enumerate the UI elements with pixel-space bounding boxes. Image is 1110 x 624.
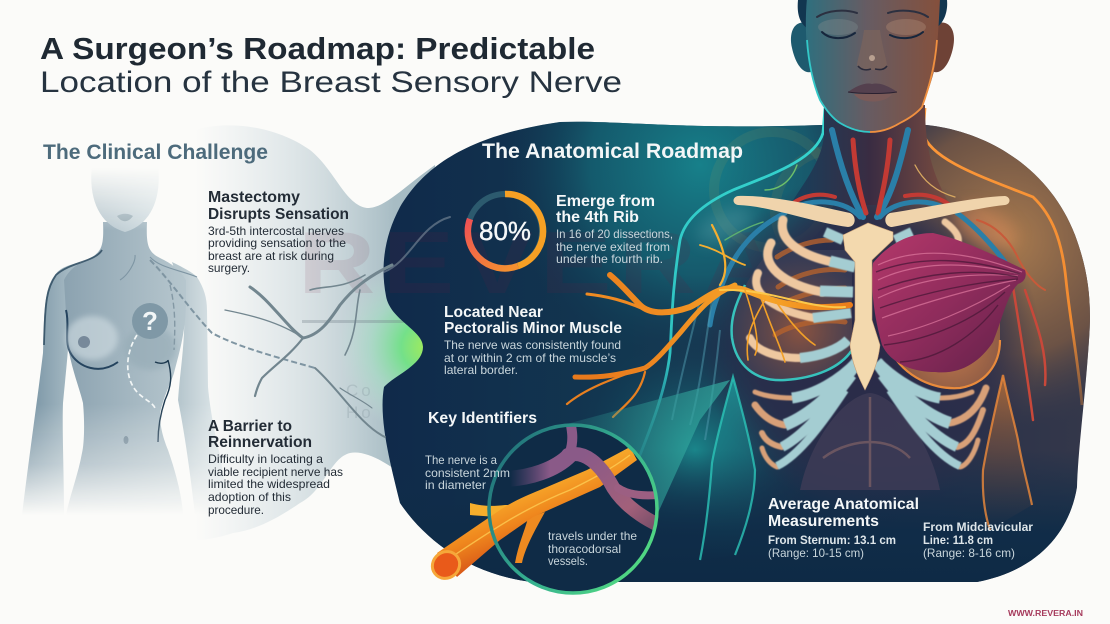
nipple	[78, 336, 90, 348]
face features	[117, 214, 133, 221]
donut chart: 80 percent	[468, 194, 543, 268]
grey nerve branches	[225, 217, 450, 437]
vessels over nerve	[568, 454, 665, 528]
lens ring	[489, 425, 657, 593]
body contour	[155, 360, 171, 442]
donut chart: 80 percent: 80%	[479, 216, 531, 246]
heading: anatomical roadmap: The Anatomical Roadmap	[482, 140, 743, 163]
text block: located near pectoralis minor: at or within 2 cm of the muscle’s	[444, 351, 616, 365]
teal lower-left body shape	[700, 377, 755, 560]
hair	[798, 0, 947, 28]
left breast shape	[66, 310, 118, 369]
text block: mastectomy disrupts sensation: providing sensation to the	[208, 236, 346, 250]
title	[40, 31, 622, 99]
callout: thoracodorsal vessels: travels under the	[548, 529, 637, 543]
neck and chest vessels	[710, 130, 1045, 420]
text block: located near pectoralis minor: The nerve was consistently found	[444, 338, 621, 352]
left breast highlight	[66, 316, 118, 360]
right lung outline	[890, 340, 1000, 388]
footer url: WWW.REVERA.IN	[1008, 609, 1083, 618]
pectoral muscle	[872, 233, 1026, 372]
text block: mastectomy disrupts sensation: Disrupts Sensation	[208, 206, 349, 223]
abdomen	[800, 393, 940, 490]
sternum	[843, 223, 893, 390]
eyes and brows	[817, 11, 928, 38]
jaw outline orange	[870, 40, 937, 132]
posterior ribs	[775, 240, 845, 335]
orange lower-right body shape	[983, 375, 1032, 530]
text block: emerge from 4th rib: the 4th Rib	[556, 209, 639, 226]
text block: midclavicular measurement	[923, 520, 1033, 560]
text block: mastectomy disrupts sensation: Mastectomy	[208, 189, 300, 206]
head	[92, 175, 158, 232]
text block: barrier to reinnervation: adoption of this	[208, 490, 291, 504]
arm muscles left	[672, 300, 720, 440]
text block: midclavicular measurement: From Midclavicular	[923, 520, 1033, 534]
text block: barrier to reinnervation: Reinnervation	[208, 434, 312, 451]
callout: nerve diameter: consistent 2mm	[425, 466, 510, 480]
nose	[857, 30, 887, 70]
text block: average anatomical measurements: Measurements	[768, 513, 879, 530]
callout: thoracodorsal vessels: thoracodorsal	[548, 542, 621, 556]
cartilage	[777, 232, 960, 466]
question badge	[132, 303, 168, 339]
text block: located near pectoralis minor: Located Near	[444, 304, 543, 321]
lens cone	[563, 380, 730, 515]
text block: average anatomical measurements: (Range: 10-15 cm)	[768, 546, 864, 560]
right breast shading	[128, 331, 176, 369]
text block: mastectomy disrupts sensation: 3rd-5th intercostal nerves	[208, 224, 344, 238]
text block: barrier to reinnervation: viable recipient nerve has	[208, 465, 343, 479]
text block: located near pectoralis minor: Pectoralis Minor Muscle	[444, 320, 622, 337]
heading: key identifiers: Key Identifiers	[428, 410, 537, 427]
text block: emerge from 4th rib: In 16 of 20 dissections,	[556, 227, 673, 241]
text block: average anatomical measurements: Average Anatomical	[768, 496, 919, 513]
torso	[64, 222, 186, 515]
ribs right	[940, 222, 986, 467]
head shape	[806, 0, 940, 132]
text block: barrier to reinnervation	[208, 418, 343, 517]
text block: emerge from 4th rib	[556, 193, 673, 266]
nerve highlight	[450, 455, 630, 558]
clavicles	[734, 196, 1010, 227]
callout: nerve diameter: in diameter	[425, 478, 486, 492]
text block: average anatomical measurements: From Sternum: 13.1 cm	[768, 533, 896, 547]
lips	[848, 83, 897, 102]
text block: located near pectoralis minor: lateral border.	[444, 363, 518, 377]
faint watermark captions	[346, 381, 374, 422]
panel: clinical challenge background	[195, 125, 440, 540]
dashed nerve path	[150, 260, 315, 368]
navel	[124, 436, 128, 444]
text block: barrier to reinnervation: A Barrier to	[208, 418, 292, 435]
right arm	[172, 262, 224, 502]
callout: nerve diameter: The nerve is a	[425, 453, 497, 467]
text block: barrier to reinnervation: limited the widespread	[208, 477, 330, 491]
title: Location of the Breast Sensory Nerve	[40, 66, 622, 99]
text block: emerge from 4th rib: the nerve exited from	[556, 240, 670, 254]
anatomy illustration base	[697, 194, 1034, 490]
jaw outline teal	[807, 40, 870, 132]
text block: located near pectoralis minor	[444, 304, 622, 377]
heading: clinical challenge: The Clinical Challenge	[43, 141, 268, 164]
left lung outline	[732, 285, 852, 380]
ears	[791, 22, 954, 72]
callout: nerve diameter	[425, 453, 510, 492]
ribs left	[750, 220, 832, 467]
text block: mastectomy disrupts sensation: breast are at risk during	[208, 249, 334, 263]
nerve end	[427, 546, 465, 584]
lower branch	[515, 512, 545, 563]
nerve: main orange branches	[567, 225, 850, 417]
green glow connector	[335, 255, 430, 440]
callout: thoracodorsal vessels	[548, 529, 637, 568]
left lung	[732, 250, 852, 380]
faint watermark captions: Ho	[346, 403, 374, 422]
key identifiers lens	[427, 420, 665, 593]
torso shading	[724, 194, 1034, 458]
text block: emerge from 4th rib: Emerge from	[556, 193, 655, 210]
text block: average anatomical measurements	[768, 496, 919, 560]
nerve tube	[437, 447, 637, 577]
shoulder outline	[44, 250, 102, 345]
neck	[790, 105, 950, 205]
text block: midclavicular measurement: (Range: 8-16 cm)	[923, 546, 1015, 560]
text block: midclavicular measurement: Line: 11.8 cm	[923, 533, 993, 547]
title: A Surgeon’s Roadmap: Predictable	[40, 31, 595, 66]
text block: barrier to reinnervation: Difficulty in locating a	[208, 452, 323, 466]
eyelids shade	[818, 19, 858, 35]
callout: thoracodorsal vessels: vessels.	[548, 554, 588, 568]
watermark: brand: REVERA	[298, 213, 788, 312]
shoulder muscle right	[948, 206, 1018, 256]
watermark over dark panel: REVERA	[298, 213, 788, 312]
left branch	[470, 503, 520, 518]
neck lines	[120, 255, 197, 280]
faint watermark captions: Co	[346, 381, 374, 400]
text block: mastectomy disrupts sensation	[208, 189, 349, 275]
face	[791, 0, 954, 132]
glow line: right body outline	[923, 108, 1082, 405]
dashed incision line	[128, 335, 155, 408]
human figure: left grey torso	[22, 165, 232, 515]
glow line: left body outline	[638, 108, 825, 460]
text block: emerge from 4th rib: under the fourth rib.	[556, 252, 663, 266]
shoulder muscle left	[697, 204, 753, 246]
panel: anatomical roadmap dark background	[370, 110, 1100, 590]
question badge: ?	[142, 306, 158, 336]
text block: barrier to reinnervation: procedure.	[208, 503, 264, 517]
left arm	[22, 262, 80, 515]
dashed vertical line	[170, 285, 175, 350]
right lung	[902, 322, 1000, 388]
text block: mastectomy disrupts sensation: surgery.	[208, 261, 250, 275]
